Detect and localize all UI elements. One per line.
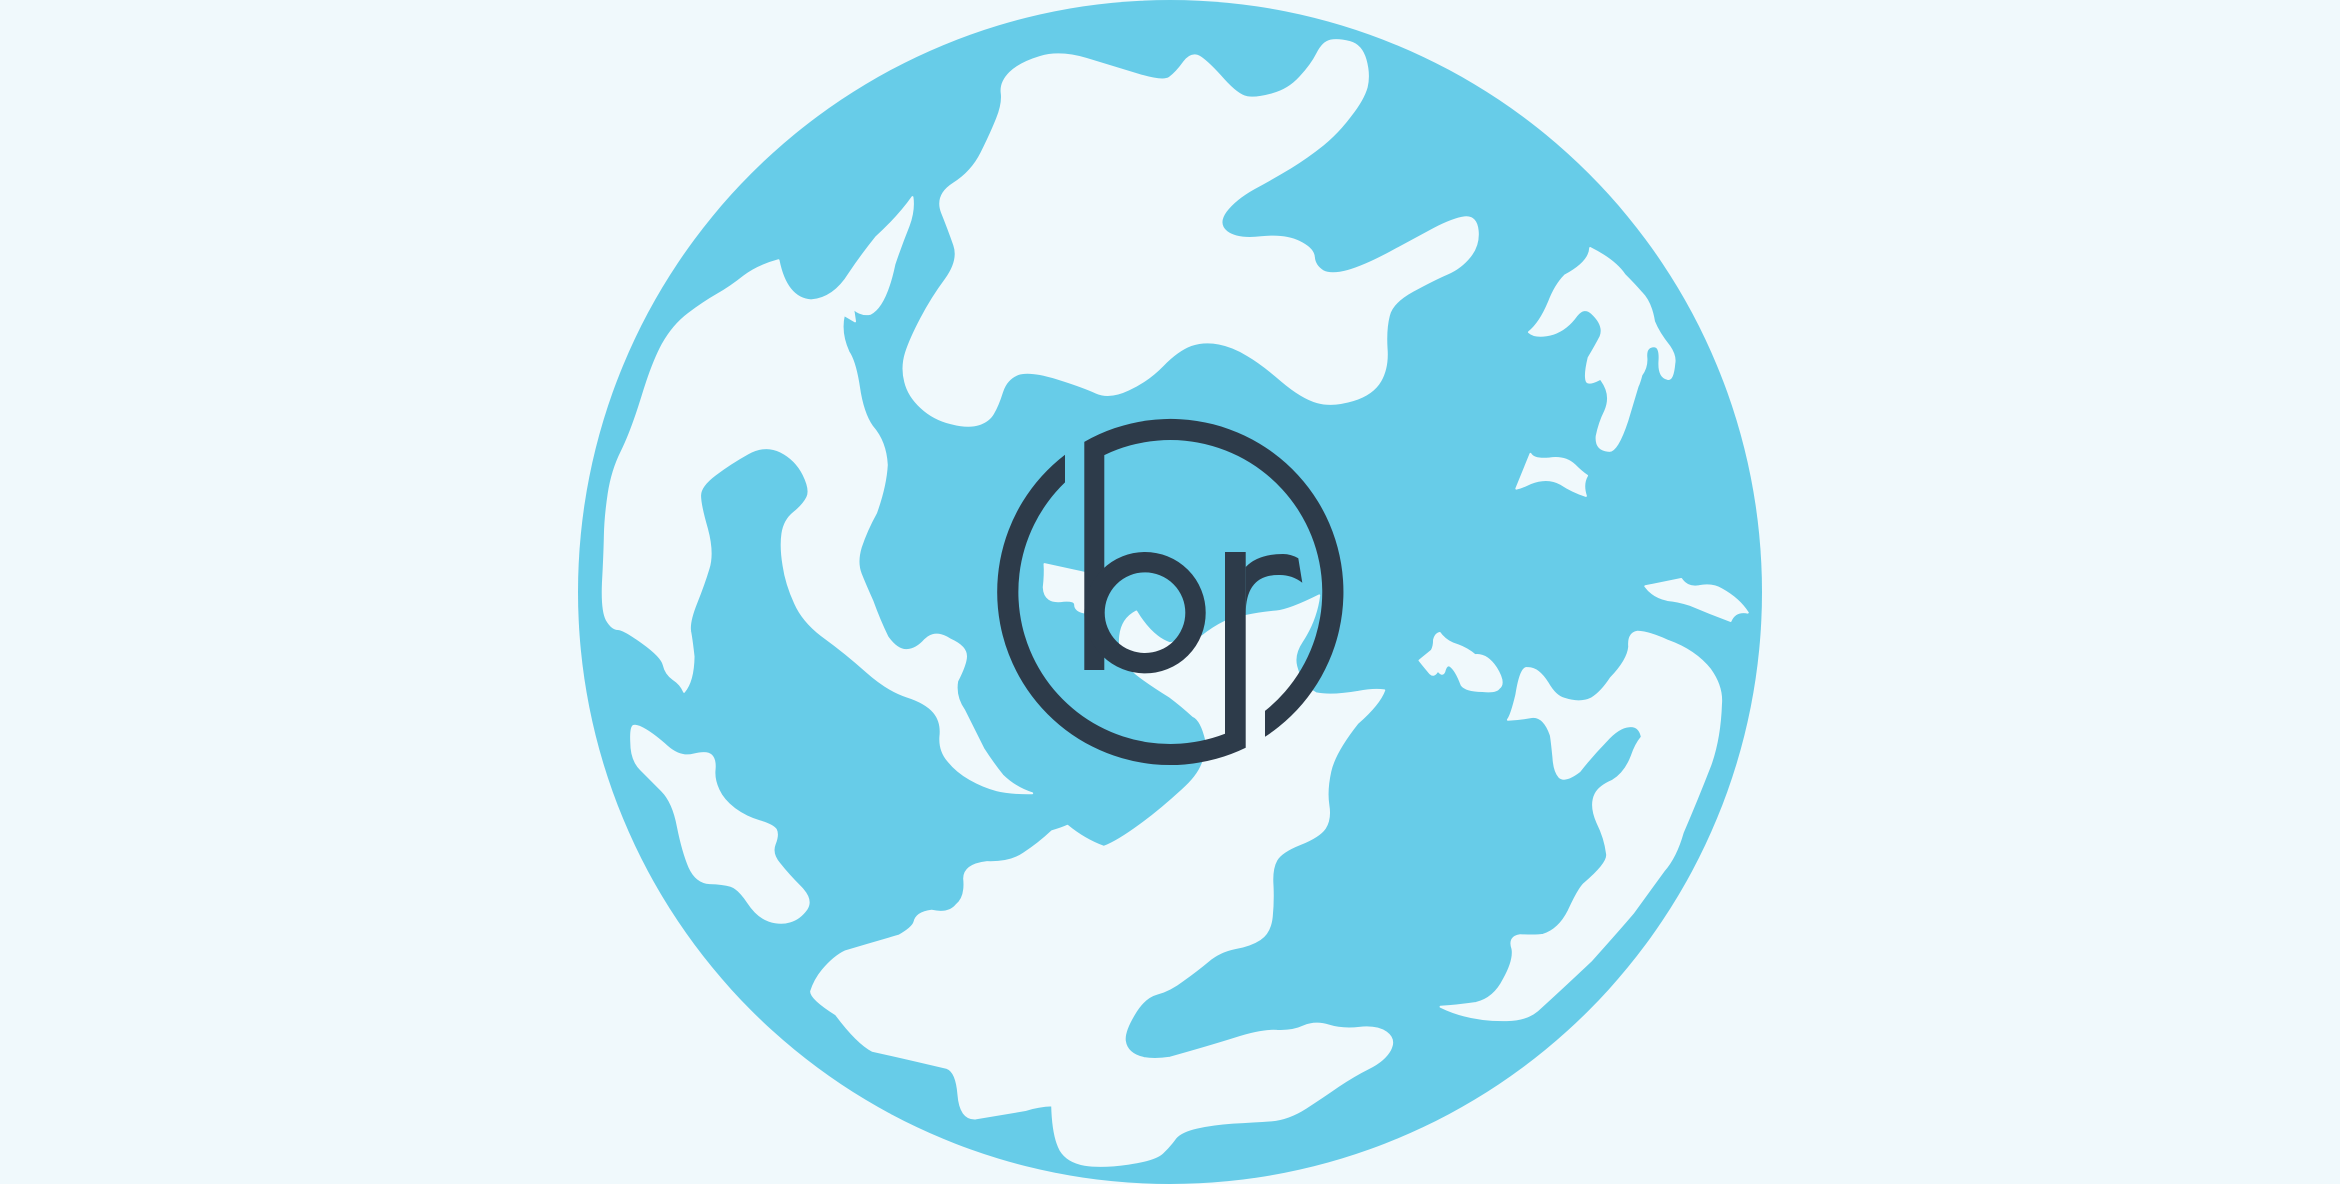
land: south-western island bbox=[631, 726, 809, 923]
land: eastern strip island bbox=[1645, 579, 1748, 621]
logo: br in a ring bbox=[997, 419, 1343, 765]
land: south-eastern crescent bbox=[1441, 632, 1721, 1020]
logo ring right arc with b stem bbox=[1084, 419, 1343, 737]
logo letter r arm bbox=[1246, 554, 1302, 613]
continents bbox=[603, 40, 1748, 1166]
logo ring left arc with r stem bbox=[997, 455, 1246, 765]
globe ocean disc bbox=[578, 0, 1762, 1184]
land: small island inside logo bbox=[1044, 564, 1085, 613]
logo letter b bowl bbox=[1094, 562, 1196, 663]
land: southern continent bbox=[811, 595, 1392, 1166]
land: north-eastern island bbox=[1529, 248, 1675, 451]
land: tiny central-east island bbox=[1419, 633, 1502, 691]
land: small wedge island bbox=[1516, 454, 1587, 496]
land: northern continent bbox=[903, 40, 1478, 426]
land: western continent bbox=[603, 197, 1032, 793]
